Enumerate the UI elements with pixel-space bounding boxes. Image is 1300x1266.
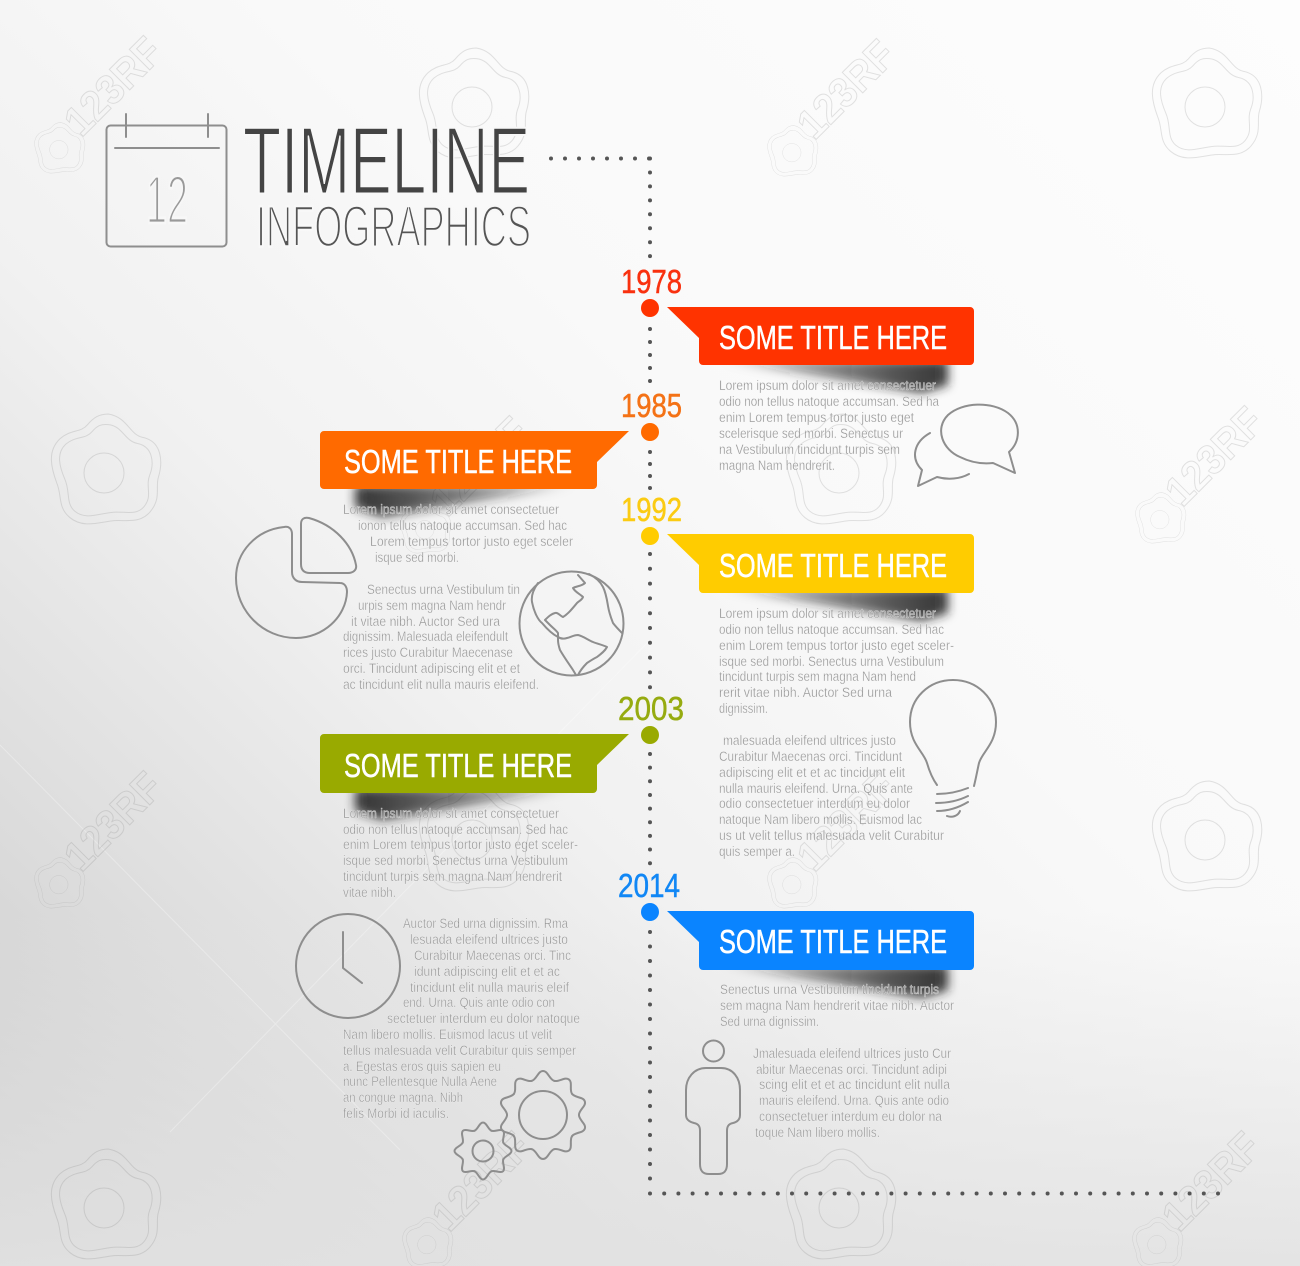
text 2014: Senectus urna Vestibulum tincidunt turpis [720, 982, 939, 997]
text 1992: natoque Nam libero mollis. Euismod lac [719, 812, 922, 827]
icon: gears [454, 1071, 588, 1180]
text 2014: consectetuer interdum eu dolor na [759, 1109, 942, 1124]
text 1992: quis semper a. [719, 844, 795, 859]
text 1992 [719, 606, 954, 859]
text 2003: a. Egestas eros quis sapien eu [343, 1059, 501, 1074]
text 1985: it vitae nibh. Auctor Sed ura [351, 614, 500, 629]
text 2014: scing elit et et ac tincidunt elit nulla [759, 1077, 950, 1092]
title: INFOGRAPHICS [256, 194, 531, 260]
text 1985: Lorem ipsum dolor sit amet consectetuer [343, 502, 559, 517]
text 2003: idunt adipiscing elit et et ac [414, 964, 560, 979]
text 1992: us ut velit tellus malesuada velit Curabitur [719, 828, 944, 843]
text 2003: end. Urna. Quis ante odio con [403, 995, 555, 1010]
year 1992: 1992 [621, 491, 682, 528]
text 1978: enim Lorem tempus tortor justo eget [719, 410, 914, 425]
text 1992: adipiscing elit et et ac tincidunt elit [719, 765, 905, 780]
text 2003: Lorem ipsum dolor sit amet consectetuer [343, 806, 559, 821]
text 1985: dignissim. Malesuada eleifendult [343, 629, 508, 644]
text 2003: Nam libero mollis. Euismod lacus ut velit [343, 1027, 552, 1042]
text 1985: ionon tellus natoque accumsan. Sed hac [358, 518, 567, 533]
icon: light bulb [910, 680, 996, 817]
shadow 2003 [355, 788, 580, 820]
year 1978: 1978 [621, 263, 682, 300]
marker 2014 [641, 903, 659, 921]
year 1985: 1985 [621, 387, 682, 424]
text 1985: urpis sem magna Nam hendr [358, 598, 506, 613]
text 1992: tincidunt turpis sem magna Nam hend [719, 669, 916, 684]
text 2003: Auctor Sed urna dignissim. Rma [403, 916, 568, 931]
text 1985: rices justo Curabitur Maecenase [343, 645, 513, 660]
text 2003: odio non tellus natoque accumsan. Sed hac [343, 822, 568, 837]
text 2014: abitur Maecenas orci. Tincidunt adipi [756, 1062, 947, 1077]
text 2003: an congue magna. Nibh [343, 1090, 463, 1105]
icon: calendar: 12 [146, 162, 188, 238]
text 1985: Lorem tempus tortor justo eget sceler [370, 534, 573, 549]
icon: globe [520, 572, 624, 676]
text 2014: Jmalesuada eleifend ultrices justo Cur [753, 1046, 951, 1061]
icon: clock [296, 914, 400, 1018]
text 1992: dignissim. [719, 701, 768, 716]
text 2003: isque sed morbi. Senectus urna Vestibulum [343, 853, 568, 868]
text 1992: isque sed morbi. Senectus urna Vestibulum [719, 654, 944, 669]
year 2003: 2003 [618, 690, 684, 727]
icon: person [686, 1040, 740, 1174]
ribbon 1985 [320, 431, 629, 489]
text 2003 [343, 806, 580, 1121]
ribbon 1992 [667, 534, 974, 593]
marker 1978 [641, 299, 659, 317]
text 1985: orci. Tincidunt adipiscing elit et et [343, 661, 520, 676]
panel: 1985 [236, 387, 682, 692]
text 1985: isque sed morbi. [375, 550, 459, 565]
dotted timeline line [551, 158, 1219, 1194]
shadow 2014 [715, 965, 948, 998]
ribbon 1978 [667, 307, 974, 365]
icon: calendar [106, 114, 226, 246]
panel: 2014 [618, 867, 974, 1174]
title: TIMELINE [243, 108, 530, 214]
text 1978: odio non tellus natoque accumsan. Sed ha [719, 394, 939, 409]
ribbon title 1992: SOME TITLE HERE [719, 547, 947, 584]
ribbon title 1978: SOME TITLE HERE [719, 319, 947, 356]
shadow 1978 [715, 360, 948, 393]
text 1992: nulla mauris eleifend. Urna. Quis ante [719, 781, 913, 796]
text 1992: Curabitur Maecenas orci. Tincidunt [719, 749, 902, 764]
text 1992: rerit vitae nibh. Auctor Sed urna [719, 685, 892, 700]
text 1985 [343, 502, 573, 692]
text 2003: lesuada eleifend ultrices justo [410, 932, 568, 947]
icon: speech bubbles [915, 405, 1018, 486]
text 1992: Lorem ipsum dolor sit amet consectetuer [719, 606, 936, 621]
marker 1992 [641, 527, 659, 545]
shadow 1985 [355, 485, 580, 517]
text 2003: felis Morbi id iaculis. [343, 1106, 449, 1121]
text 2003: enim Lorem tempus tortor justo eget sceler- [343, 837, 578, 852]
icon: pie chart [236, 518, 356, 638]
text 2003: sectetuer interdum eu dolor natoque [387, 1011, 580, 1026]
text 2014: Sed urna dignissim. [720, 1014, 819, 1029]
text 2003: nunc Pellentesque Nulla Aene [343, 1074, 497, 1089]
text 1992: enim Lorem tempus tortor justo eget sceler- [719, 638, 954, 653]
text 1978: na Vestibulum tincidunt turpis sem [719, 442, 900, 457]
text 2014 [720, 982, 954, 1140]
title [243, 108, 531, 260]
text 2003: tellus malesuada velit Curabitur quis semper [343, 1043, 576, 1058]
text 1978: scelerisque sed morbi. Senectus ur [719, 426, 903, 441]
ribbon title 2014: SOME TITLE HERE [719, 923, 947, 960]
text 2003: Curabitur Maecenas orci. Tinc [414, 948, 571, 963]
shadow 1992 [715, 588, 948, 621]
ribbon 2003 [320, 734, 629, 793]
text 2014: toque Nam libero mollis. [755, 1125, 880, 1140]
ribbon title 1985: SOME TITLE HERE [344, 443, 572, 480]
text 1992: odio non tellus natoque accumsan. Sed hac [719, 622, 944, 637]
text 2003: tincidunt elit nulla mauris eleif [410, 980, 569, 995]
text 2014: sem magna Nam hendrerit vitae nibh. Auctor [720, 998, 954, 1013]
text 1992: odio consectetuer interdum eu dolor [719, 796, 910, 811]
text 2003: tincidunt turpis sem magna Nam hendrerit [343, 869, 562, 884]
text 1985: Senectus urna Vestibulum tin [367, 582, 520, 597]
text 1978: Lorem ipsum dolor sit amet consectetuer [719, 378, 936, 393]
text 2014: mauris eleifend. Urna. Quis ante odio [759, 1093, 949, 1108]
text 1992: malesuada eleifend ultrices justo [723, 733, 896, 748]
panel: 1978 [621, 263, 1018, 486]
ribbon title 2003: SOME TITLE HERE [344, 747, 572, 784]
panel: 2003 [296, 690, 684, 1180]
marker 2003 [641, 726, 659, 744]
marker 1985 [641, 423, 659, 441]
text 1978 [719, 378, 939, 473]
year 2014: 2014 [618, 867, 680, 904]
text 2003: vitae nibh. [343, 885, 396, 900]
text 1978: magna Nam hendrerit. [719, 458, 835, 473]
panel: 1992 [621, 491, 996, 859]
ribbon 2014 [667, 911, 974, 970]
text 1985: ac tincidunt elit nulla mauris eleifend. [343, 677, 539, 692]
